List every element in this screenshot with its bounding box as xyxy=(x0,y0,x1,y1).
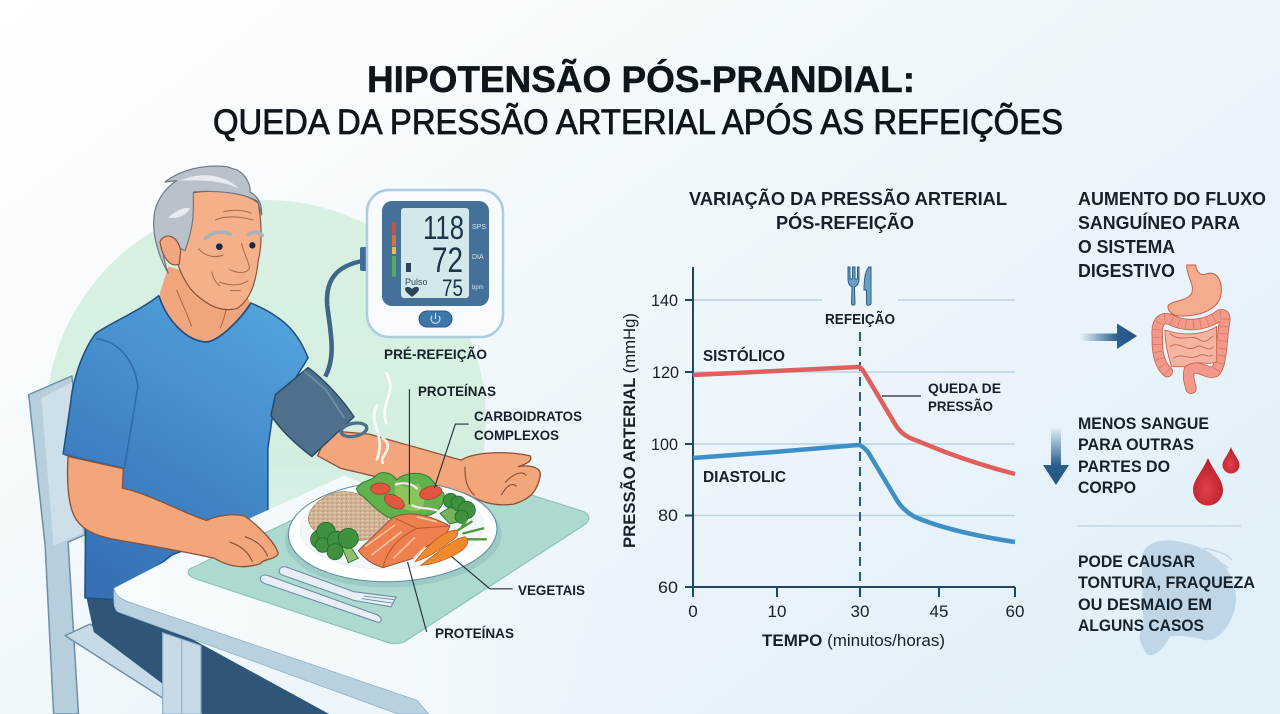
blood pressure cuff xyxy=(271,368,354,456)
pressure drop leader xyxy=(882,395,921,397)
collar xyxy=(159,296,251,342)
systolic label: SISTÓLICO xyxy=(703,346,785,365)
text: symptoms: ALGUNS CASOS xyxy=(1078,616,1204,635)
icon: fork and knife xyxy=(848,267,871,305)
head of man xyxy=(154,166,262,342)
plate xyxy=(287,478,499,585)
lettuce xyxy=(357,473,444,518)
eyebrows xyxy=(205,232,262,239)
shirt xyxy=(63,296,308,600)
icon: down arrow xyxy=(1043,427,1069,485)
power button xyxy=(419,311,452,327)
y tick labels xyxy=(651,291,679,597)
x tick labels: 30 xyxy=(851,602,869,621)
diastolic label: DIASTOLIC xyxy=(703,469,786,486)
face xyxy=(176,191,261,310)
chart title: PÓS-REFEIÇÃO xyxy=(776,212,914,233)
lcd screen xyxy=(401,208,469,298)
food labels: PROTEÍNAS xyxy=(418,383,496,399)
colon xyxy=(1157,315,1225,388)
power icon xyxy=(431,313,440,323)
title: HIPOTENSÃO PÓS-PRANDIAL: xyxy=(367,58,915,100)
x tick labels: 0 xyxy=(688,602,698,621)
axes xyxy=(685,267,1015,597)
pulse label: Pulso xyxy=(405,277,428,287)
plate well xyxy=(299,482,485,572)
diastolic line xyxy=(693,445,1015,542)
salmon stripes xyxy=(365,517,437,558)
status bars xyxy=(392,222,396,277)
unit labels xyxy=(472,224,486,291)
text: less blood elsewhere: PARA OUTRAS xyxy=(1078,435,1194,454)
title xyxy=(213,58,1063,142)
text: less blood elsewhere: MENOS SANGUE xyxy=(1078,414,1209,433)
small intestine xyxy=(1165,327,1217,367)
text: increased digestive flow: SANGUÍNEO PARA xyxy=(1078,212,1240,233)
carrot leaves xyxy=(458,520,486,539)
monitor connector xyxy=(360,247,368,271)
salmon xyxy=(358,514,450,568)
plate of food xyxy=(283,473,503,591)
small marker xyxy=(406,263,411,272)
cuff ring xyxy=(340,421,368,439)
x tick labels xyxy=(688,602,1024,621)
plate shadow xyxy=(283,484,503,591)
hair xyxy=(154,166,262,273)
hair highlights xyxy=(168,175,240,218)
line chart xyxy=(619,267,1024,650)
fork tines xyxy=(362,596,394,603)
chart title xyxy=(689,188,1007,233)
x tick labels: 60 xyxy=(1006,602,1024,621)
meal marker xyxy=(859,332,861,587)
sleeve seam xyxy=(63,339,138,468)
text: increased digestive flow: DIGESTIVO xyxy=(1078,260,1175,281)
blood pressure monitor xyxy=(360,190,503,337)
reading: pulse: 75 xyxy=(442,275,463,302)
reading: systolic: 118 xyxy=(423,209,464,246)
text: symptoms xyxy=(1078,552,1255,635)
food labels: PROTEÍNAS xyxy=(435,625,514,641)
title: QUEDA DA PRESSÃO ARTERIAL APÓS AS REFEIÇÕES xyxy=(213,102,1063,142)
text: increased digestive flow: AUMENTO DO FLUXO xyxy=(1078,188,1266,209)
monitor body xyxy=(367,190,503,337)
y tick labels: 100 xyxy=(651,435,678,454)
knife xyxy=(260,575,381,623)
text: symptoms: OU DESMAIO EM xyxy=(1078,595,1212,614)
label: pre-meal: PRÉ-REFEIÇÃO xyxy=(384,345,487,362)
carrots xyxy=(415,530,468,565)
y tick labels: 80 xyxy=(658,506,678,525)
food labels: VEGETAIS xyxy=(518,582,585,598)
neck lines xyxy=(177,290,227,328)
icon: digestive system xyxy=(1157,265,1225,388)
text: symptoms: PODE CAUSAR xyxy=(1078,552,1195,571)
tomatoes xyxy=(371,483,443,512)
y tick labels: 140 xyxy=(651,291,678,310)
stomach xyxy=(1168,265,1221,316)
illustration: man at table xyxy=(29,296,600,714)
icon: heart xyxy=(405,287,419,297)
table top xyxy=(114,476,600,714)
arms, cuff and steam xyxy=(68,261,540,567)
text: increased digestive flow: O SISTEMA xyxy=(1078,236,1175,257)
text: less blood elsewhere: PARTES DO xyxy=(1078,457,1170,476)
left broccoli xyxy=(311,522,358,563)
food leader lines xyxy=(408,389,513,632)
colon folds xyxy=(1157,315,1225,372)
cuff tube xyxy=(325,261,364,377)
food labels xyxy=(418,383,585,641)
y tick labels: 60 xyxy=(658,578,678,597)
onion and dressing xyxy=(395,483,440,512)
face lines xyxy=(198,210,253,291)
meal label: REFEIÇÃO xyxy=(825,310,895,328)
table front edge and leg xyxy=(114,588,429,714)
right forearm and hand xyxy=(318,431,540,505)
right broccoli xyxy=(440,493,475,524)
salmon seam xyxy=(383,518,450,567)
neck xyxy=(159,267,251,342)
icon: right arrow xyxy=(1080,324,1137,349)
panel: blood flow effects xyxy=(1043,188,1266,655)
placemat xyxy=(188,459,589,644)
ear xyxy=(160,236,181,265)
eyes xyxy=(216,242,255,250)
unit labels: DIA xyxy=(472,254,484,261)
green circle behind man xyxy=(46,200,486,640)
icon: faded dizzy head xyxy=(1140,540,1236,655)
x tick labels: 10 xyxy=(768,602,786,621)
pressure drop label: PRESSÃO xyxy=(928,397,993,414)
food labels: CARBOIDRATOS xyxy=(474,408,582,424)
text: less blood elsewhere xyxy=(1078,414,1209,497)
monitor panel xyxy=(382,201,489,306)
y tick labels: 120 xyxy=(652,363,679,382)
chair xyxy=(29,376,245,714)
reading: diastolic: 72 xyxy=(432,241,463,280)
trousers xyxy=(86,596,329,714)
pressure drop label xyxy=(928,380,1001,414)
systolic line xyxy=(693,367,1015,474)
chart title: VARIAÇÃO DA PRESSÃO ARTERIAL xyxy=(689,188,1007,209)
text: increased digestive flow xyxy=(1078,188,1266,281)
y axis title: PRESSÃO ARTERIAL (mmHg) xyxy=(619,313,639,548)
rice xyxy=(308,492,388,541)
x axis title: TEMPO (minutos/horas) xyxy=(762,631,945,650)
cutlery xyxy=(260,567,396,623)
x tick labels: 45 xyxy=(930,602,948,621)
unit labels: SPS xyxy=(472,224,486,231)
icon: blood drops xyxy=(1193,447,1240,505)
divider xyxy=(1077,525,1241,527)
pressure drop label: QUEDA DE xyxy=(928,380,1001,396)
fork xyxy=(279,567,396,607)
text: symptoms: TONTURA, FRAQUEZA xyxy=(1078,573,1255,592)
left arm and hand xyxy=(68,456,278,567)
steam xyxy=(374,373,390,463)
food labels: COMPLEXOS xyxy=(474,427,559,443)
unit labels: bpm xyxy=(472,285,484,291)
text: less blood elsewhere: CORPO xyxy=(1078,478,1136,497)
